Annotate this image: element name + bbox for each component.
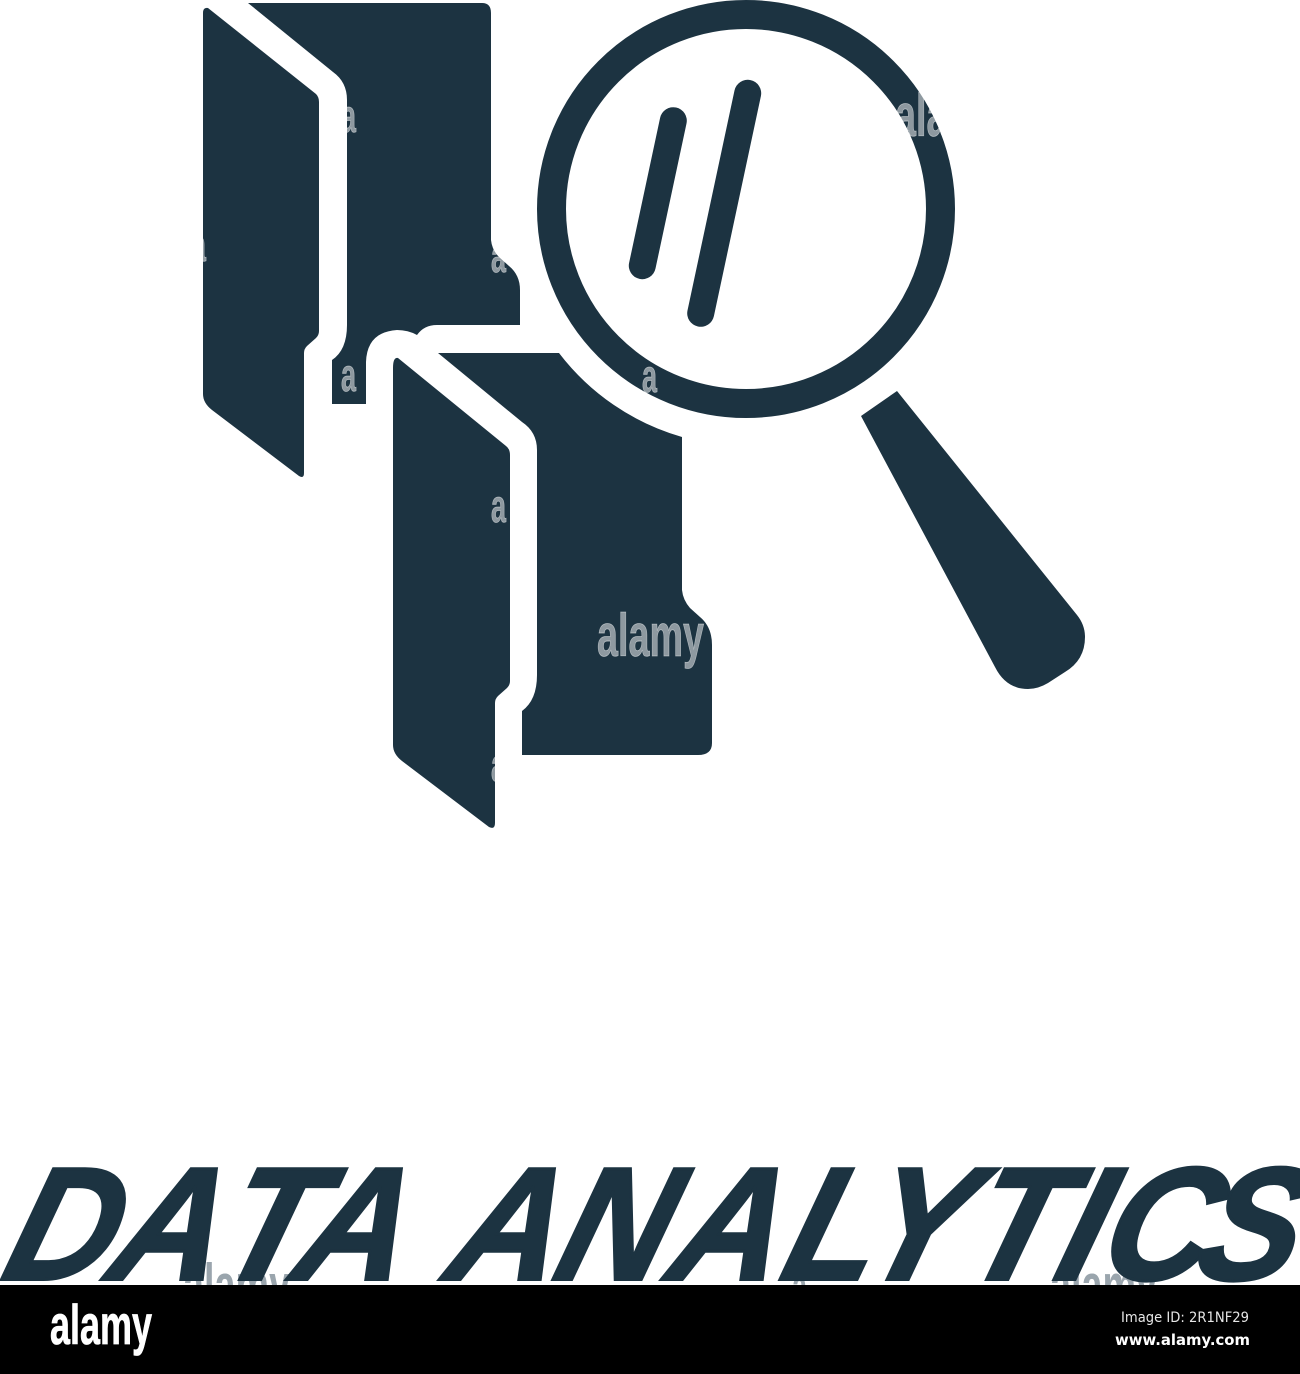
watermark overlay on icon: alamy xyxy=(597,602,704,669)
website: www.alamy.com xyxy=(1115,1331,1250,1349)
watermark behind title: alamy xyxy=(1050,1252,1157,1319)
image id: Image ID: 2R1NF29 xyxy=(1121,1310,1249,1326)
watermark overlay on icon: a xyxy=(341,90,356,142)
watermark overlay on icon: alamy xyxy=(895,82,1002,149)
footer logo: alamy xyxy=(50,1293,152,1356)
watermark behind title xyxy=(183,1252,1157,1319)
watermark overlay on icon: a xyxy=(491,739,506,791)
icon: bottom folder xyxy=(393,353,712,828)
watermark overlay on icon: a xyxy=(341,349,356,401)
watermark overlay on icon: a xyxy=(491,480,506,532)
icon: top folder xyxy=(203,3,520,477)
watermark overlay on icon: a xyxy=(191,219,206,271)
watermark overlay on icon: a xyxy=(642,350,657,402)
footer bar xyxy=(0,1285,1300,1374)
watermark overlay on icon xyxy=(191,82,1002,791)
watermark overlay on icon: a xyxy=(491,230,506,282)
icon: magnifying glass xyxy=(552,14,1085,689)
watermark behind title: a xyxy=(792,1260,807,1312)
icon: data analytics folders and magnifier xyxy=(203,3,1085,828)
watermark behind title: alamy xyxy=(183,1252,290,1319)
